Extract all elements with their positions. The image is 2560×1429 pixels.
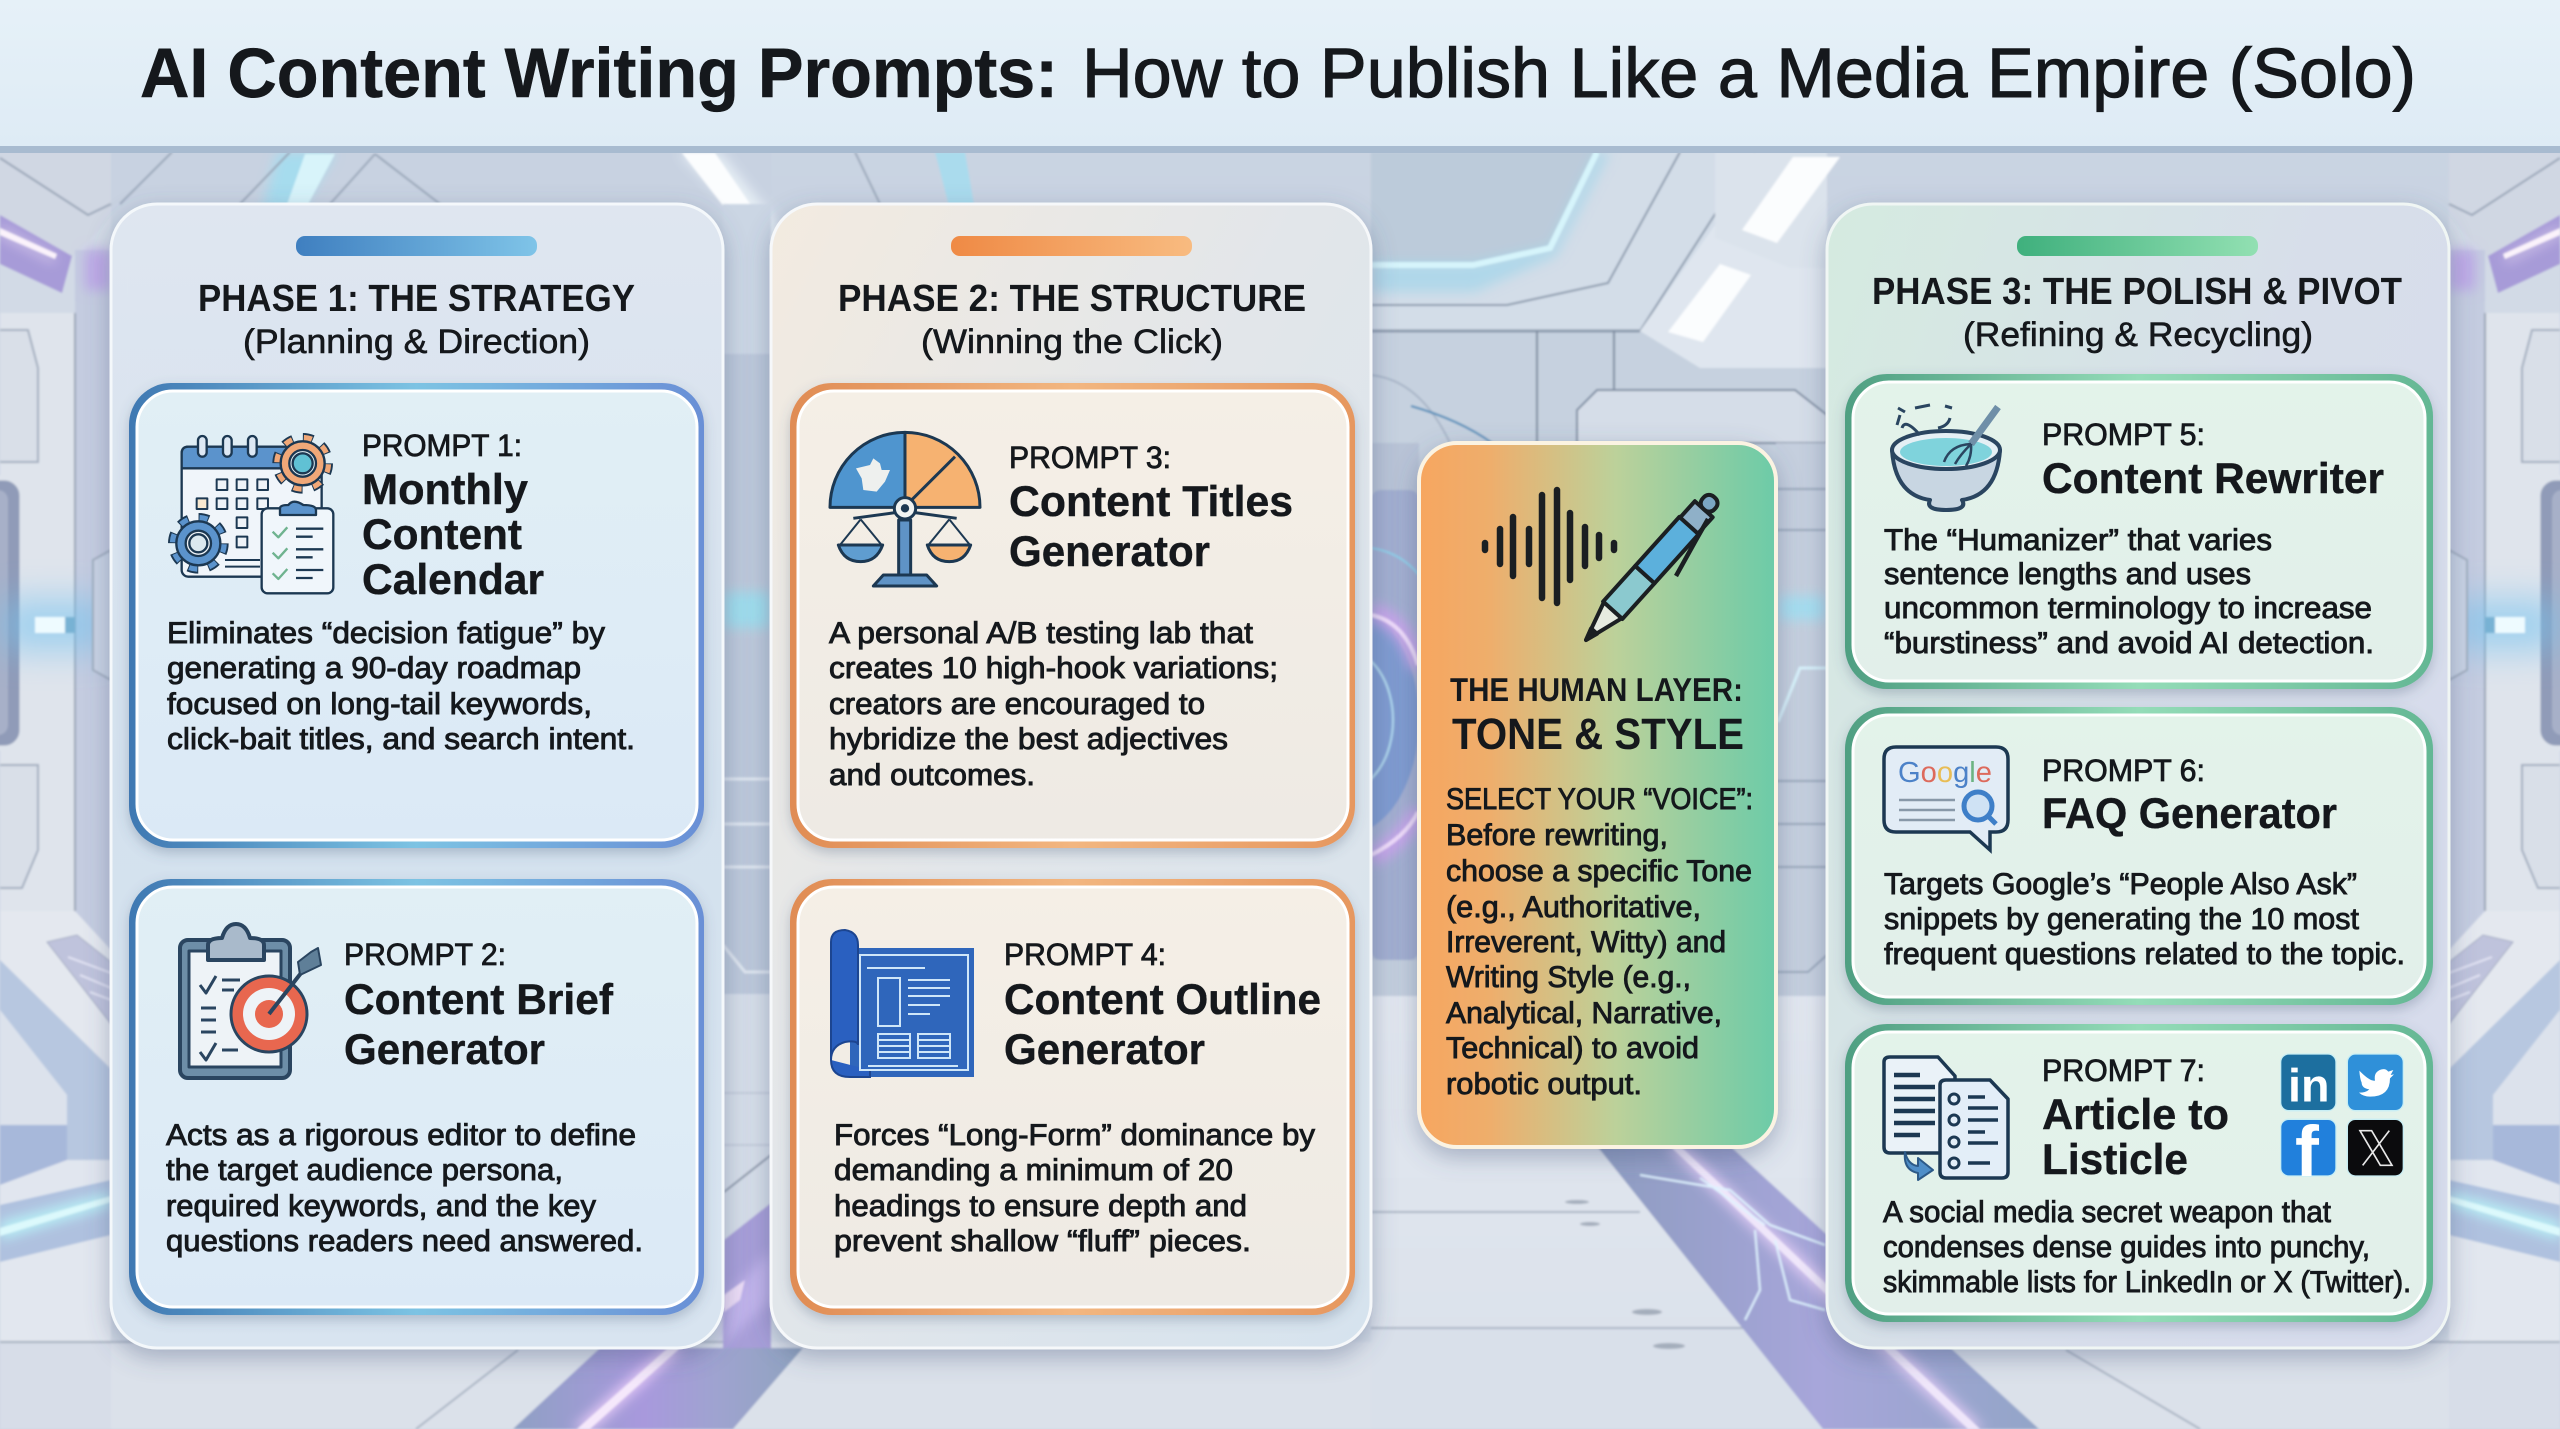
side wall right (2449, 152, 2560, 1429)
card: prompt 7 (1845, 1024, 2433, 1322)
heading phase 3: (Refining & Recycling) (1963, 316, 2313, 354)
prompt 4 heading: PROMPT 4: (1004, 937, 1166, 972)
text: select your voice: Irreverent, Witty) and (1446, 926, 1726, 959)
floor (111, 996, 2451, 1429)
icon: x (2347, 1119, 2403, 1176)
prompt 2 body: questions readers need answered. (166, 1225, 643, 1258)
prompt 4 heading: Content Outline (1004, 976, 1321, 1024)
prompt 2 body: required keywords, and the key (166, 1190, 596, 1223)
icon: facebook: f (2295, 1111, 2319, 1191)
icon: sound wave (1485, 490, 1614, 603)
prompt 3 heading: Generator (1009, 528, 1210, 576)
card: prompt 2 (129, 879, 704, 1315)
heading phase 1: (Planning & Direction) (243, 323, 590, 361)
prompt 2 heading: Content Brief (344, 976, 614, 1024)
prompt 1 body: focused on long-tail keywords, (167, 688, 592, 721)
accent bar phase 1 (296, 236, 537, 256)
prompt 3 body: and outcomes. (829, 759, 1035, 792)
prompt 4 heading: Generator (1004, 1026, 1205, 1074)
prompt 3 body (829, 617, 1278, 792)
prompt 2 body: Acts as a rigorous editor to define (166, 1119, 636, 1152)
prompt 2 heading: Generator (344, 1026, 545, 1074)
card: prompt 3 (790, 383, 1355, 848)
header band (0, 0, 2560, 153)
prompt 7 heading (2042, 1053, 2229, 1184)
prompt 5 heading: Content Rewriter (2042, 455, 2384, 503)
prompt 7 heading: Listicle (2042, 1136, 2188, 1184)
heading phase 3: PHASE 3: THE POLISH & PIVOT (1872, 271, 2402, 313)
text: select your voice: Writing Style (e.g., (1446, 961, 1691, 994)
side wall left (0, 152, 111, 1429)
floor light strip right (1597, 1146, 2039, 1429)
text: select your voice: SELECT YOUR “VOICE”: (1446, 783, 1753, 816)
prompt 2 body: the target audience persona, (166, 1154, 563, 1187)
card: prompt 1 (129, 383, 704, 848)
icon: linkedin: in (2288, 1059, 2329, 1111)
prompt 7 body (1883, 1196, 2411, 1299)
prompt 2 body (166, 1119, 643, 1258)
prompt 1 body: Eliminates “decision fatigue” by (167, 617, 605, 650)
prompt 7 heading: Article to (2042, 1091, 2229, 1139)
prompt 7 body: condenses dense guides into punchy, (1883, 1231, 2370, 1264)
card: prompt 5 (1845, 374, 2433, 689)
panel: phase 3 the polish and pivot (1827, 204, 2449, 1348)
ceiling left (111, 152, 975, 250)
prompt 1 body: generating a 90-day roadmap (167, 652, 581, 685)
prompt 1 heading: Content (362, 511, 522, 559)
heading: human layer: TONE & STYLE (1452, 710, 1744, 759)
prompt 4 heading (1004, 937, 1321, 1074)
icon: scales and split gauge (830, 432, 980, 586)
circular portal arcs (1271, 443, 1419, 996)
heading phase 2: (Winning the Click) (921, 323, 1223, 361)
prompt 3 body: hybridize the best adjectives (829, 723, 1228, 756)
prompt 3 heading (1009, 440, 1293, 576)
prompt 6 body: snippets by generating the 10 most (1884, 903, 2360, 936)
icons: social media logos (2281, 1054, 2403, 1191)
heading phase 1 (198, 278, 635, 361)
heading: human layer (1450, 671, 1744, 759)
prompt 5 heading (2042, 417, 2384, 503)
icon: clipboard and target (180, 924, 321, 1078)
prompt 4 body: demanding a minimum of 20 (834, 1154, 1233, 1187)
text: select your voice: choose a specific Tone (1446, 855, 1752, 888)
prompt 6 heading: FAQ Generator (2042, 790, 2337, 838)
prompt 6 body (1884, 868, 2405, 971)
prompt 4 body (834, 1119, 1315, 1258)
heading phase 1: PHASE 1: THE STRATEGY (198, 278, 635, 320)
prompt 1 body: click-bait titles, and search intent. (167, 723, 635, 756)
prompt 3 body: A personal A/B testing lab that (829, 617, 1254, 650)
accent bar phase 3 (2017, 236, 2258, 256)
prompt 5 body: sentence lengths and uses (1884, 558, 2251, 591)
heading phase 2 (838, 278, 1306, 361)
center back wall (1271, 152, 1840, 996)
gap column right of center (1776, 443, 1827, 996)
prompt 5 body (1884, 524, 2374, 660)
prompt 3 heading: PROMPT 3: (1009, 440, 1171, 475)
prompt 6 heading (2042, 753, 2337, 838)
icon: google search bubble (1884, 747, 2008, 850)
prompt 5 heading: PROMPT 5: (2042, 417, 2205, 452)
accent bar phase 2 (951, 236, 1192, 256)
text: select your voice (1446, 783, 1753, 1101)
icon: mixing bowl and whisk (1892, 405, 2000, 510)
card: prompt 6 (1845, 707, 2433, 1005)
prompt 6 body: frequent questions related to the topic. (1884, 938, 2405, 971)
prompt 3 heading: Content Titles (1009, 478, 1293, 526)
prompt 4 body: Forces “Long-Form” dominance by (834, 1119, 1315, 1152)
text: select your voice: robotic output. (1446, 1068, 1642, 1101)
prompt 1 heading: Monthly (362, 466, 528, 514)
text: select your voice: Technical) to avoid (1446, 1032, 1699, 1065)
panel: the human layer (1419, 443, 1776, 1147)
title: How to Publish Like a Media Empire (Solo) (1082, 34, 2416, 112)
icon: blueprint (831, 930, 974, 1077)
prompt 3 body: creates 10 high-hook variations; (829, 652, 1278, 685)
card: prompt 4 (790, 879, 1355, 1315)
prompt 1 body (167, 617, 635, 756)
gap column between phases 1 and 2 (723, 204, 771, 1348)
prompt 5 body: “burstiness” and avoid AI detection. (1884, 627, 2374, 660)
icon: pen (1576, 489, 1724, 649)
prompt 2 heading (344, 937, 614, 1074)
title: AI Content Writing Prompts: (140, 34, 1058, 112)
prompt 4 body: headings to ensure depth and (834, 1190, 1247, 1223)
icon: calendar with gears and checklist (173, 436, 333, 593)
icon: documents to list (1884, 1057, 2008, 1180)
icon: google search bubble: Google (1898, 757, 1992, 789)
prompt 6 heading: PROMPT 6: (2042, 753, 2205, 788)
prompt 1 heading: PROMPT 1: (362, 428, 522, 463)
prompt 2 heading: PROMPT 2: (344, 937, 506, 972)
prompt 6 body: Targets Google’s “People Also Ask” (1884, 868, 2357, 901)
prompt 3 body: creators are encouraged to (829, 688, 1205, 721)
heading phase 3 (1872, 271, 2402, 354)
icon: twitter (2347, 1054, 2403, 1111)
prompt 1 heading (362, 428, 544, 604)
prompt 1 heading: Calendar (362, 556, 544, 604)
text: select your voice: (e.g., Authoritative, (1446, 891, 1701, 924)
heading: human layer: THE HUMAN LAYER: (1450, 671, 1743, 708)
prompt 5 body: uncommon terminology to increase (1884, 592, 2372, 625)
heading phase 2: PHASE 2: THE STRUCTURE (838, 278, 1306, 320)
panel: phase 1 the strategy (111, 204, 723, 1348)
prompt 7 heading: PROMPT 7: (2042, 1053, 2205, 1088)
floor light strip left (513, 1203, 803, 1429)
text: select your voice: Before rewriting, (1446, 819, 1668, 852)
prompt 5 body: The “Humanizer” that varies (1884, 524, 2272, 557)
prompt 4 body: prevent shallow “fluff” pieces. (834, 1225, 1251, 1258)
prompt 7 body: A social media secret weapon that (1883, 1196, 2332, 1229)
text: select your voice: Analytical, Narrative, (1446, 997, 1722, 1030)
prompt 7 body: skimmable lists for LinkedIn or X (Twitter). (1883, 1266, 2411, 1299)
panel: phase 2 the structure (771, 204, 1371, 1348)
